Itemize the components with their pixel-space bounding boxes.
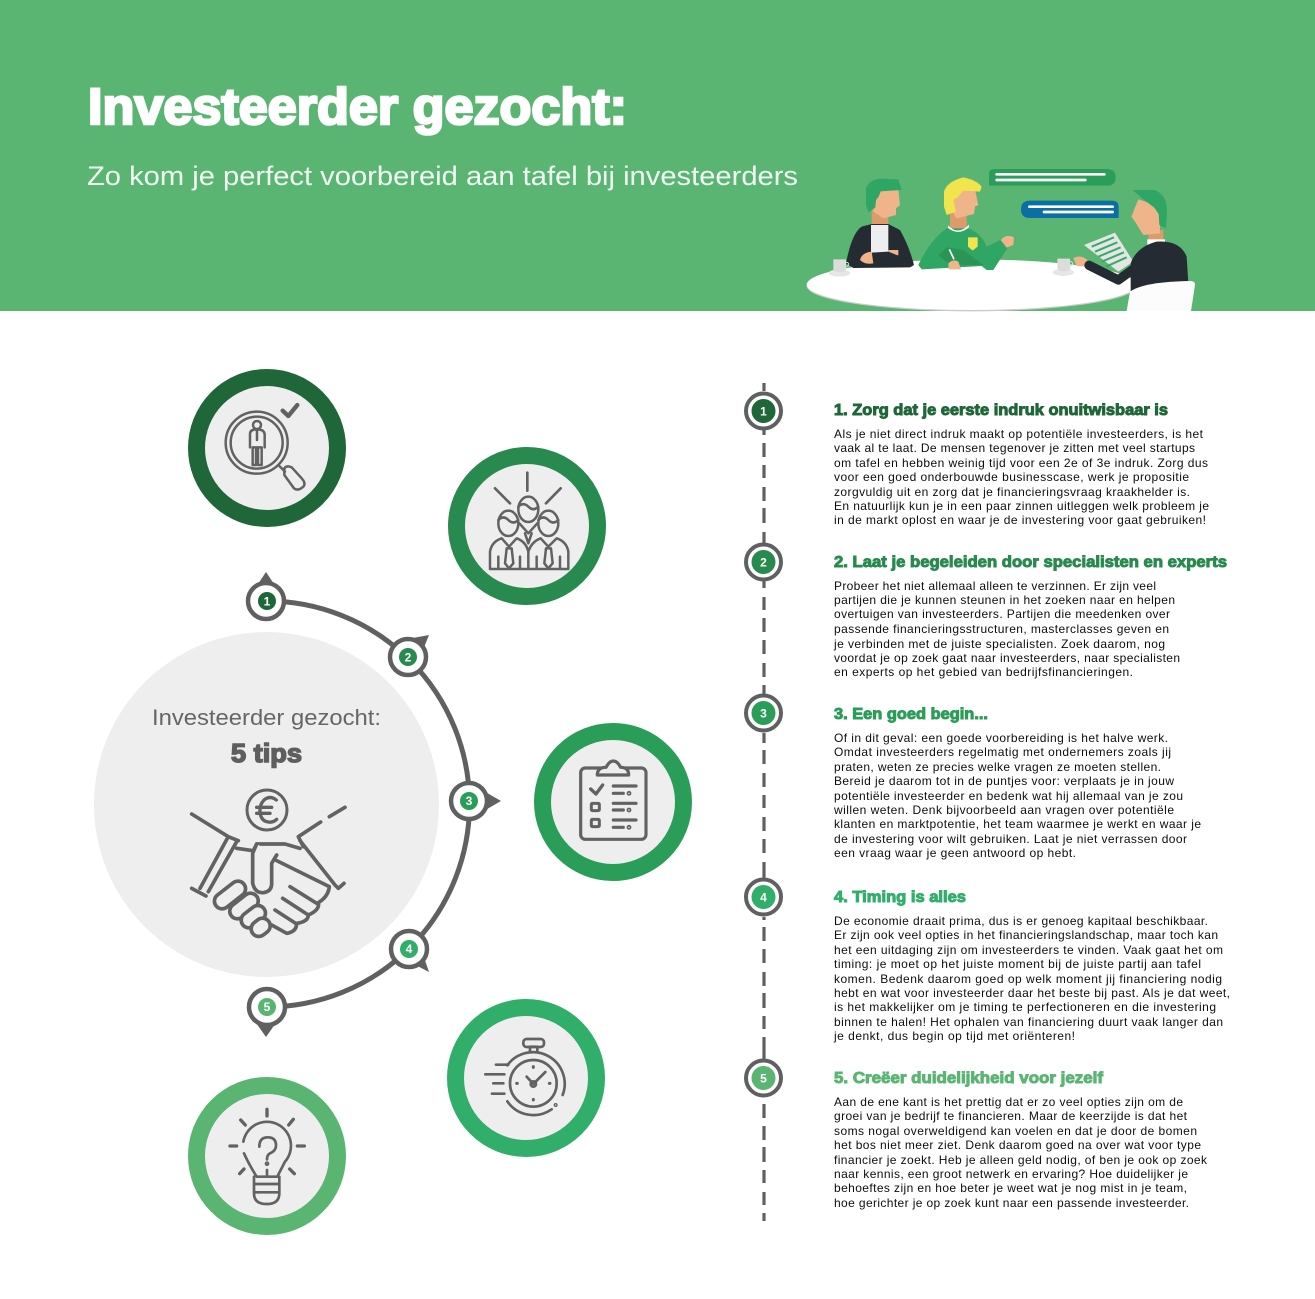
tip 4 body bbox=[833, 914, 1230, 1043]
timeline bbox=[746, 383, 781, 1221]
title: Investeerder gezocht: bbox=[88, 78, 627, 135]
tip 2 body bbox=[833, 579, 1180, 679]
tip 2 body: voordat je op zoek gaat naar investeerders, naar specialisten bbox=[834, 651, 1180, 665]
icon circle 2: experts bbox=[456, 456, 598, 596]
tip 3 body: Of in dit geval: een goede voorbereiding is het halve werk. bbox=[834, 731, 1168, 745]
arc marker 1 bbox=[248, 572, 284, 619]
arc marker 2 bbox=[390, 635, 429, 675]
timeline marker 4 bbox=[746, 880, 781, 914]
tip 5 heading: 5. Creëer duidelijkheid voor jezelf bbox=[834, 1070, 1104, 1087]
tip 5 body: Aan de ene kant is het prettig dat er zo veel opties zijn om de bbox=[834, 1095, 1183, 1109]
tip 1 body: Als je niet direct indruk maakt op potentiële investeerders, is het bbox=[834, 427, 1204, 441]
tip 4 body: hebt en wat voor investeerder daar het beste bij past. Als je dat weet, bbox=[834, 986, 1230, 1000]
tip 2 heading: 2. Laat je begeleiden door specialisten en experts bbox=[834, 554, 1227, 571]
tip 5 body: groei van je bedrijf te financieren. Maar de keerzijde is dat het bbox=[834, 1109, 1188, 1123]
tip 1 body: in de markt oplost en waar je de investering voor gaat gebruiken! bbox=[834, 513, 1206, 527]
icon circle 1: magnifier bbox=[196, 378, 338, 518]
tip 2 body: partijen die je kunnen steunen in het zoeken naar en helpen bbox=[834, 593, 1175, 607]
arc marker 2: 2 bbox=[405, 650, 412, 664]
tip 2 body: overtuigen van investeerders. Partijen die meedenken over bbox=[834, 607, 1170, 621]
timeline marker 2: 2 bbox=[760, 556, 767, 570]
tip 4 body: timing: je moet op het juiste moment bij de juiste partij aan tafel bbox=[834, 957, 1201, 971]
tip 4 body: binnen te halen! Het ophalen van financiering duurt vaak langer dan bbox=[834, 1015, 1223, 1029]
timeline marker 4: 4 bbox=[760, 890, 767, 904]
tip 4 bbox=[833, 889, 1230, 1043]
tip 5 bbox=[834, 1070, 1208, 1210]
illustration: meeting at table bbox=[807, 169, 1195, 311]
tip 4 body: het een uitdaging zijn om investeerders te vinden. Vaak gaat het om bbox=[834, 943, 1223, 957]
tip 3 body: Bereid je daarom tot in de puntjes voor: verplaats je in jouw bbox=[834, 774, 1174, 788]
person left bbox=[846, 179, 914, 268]
tip 1 body: zorgvuldig uit en zorg dat je financieringsvraag kraakhelder is. bbox=[834, 485, 1190, 499]
tip 4 body: je denkt, dus begin op tijd met oriënteren! bbox=[833, 1029, 1075, 1043]
tip 3 body: willen weten. Denk bijvoorbeeld aan vragen over potentiële bbox=[833, 803, 1174, 817]
tip 3 body: klanten en marktpotentie, het team waarmee je werkt en waar je bbox=[834, 817, 1201, 831]
tip 3 body: een vraag waar je geen antwoord op hebt. bbox=[834, 846, 1076, 860]
tip 5 body: hoe gerichter je op zoek kunt naar een passende investeerder. bbox=[834, 1196, 1189, 1210]
arc marker 4: 4 bbox=[406, 942, 413, 956]
tip 4 body: Er zijn ook veel opties in het financieringslandschap, maar toch kan bbox=[834, 928, 1218, 942]
icon circle 3: checklist bbox=[542, 732, 684, 872]
icon: clipboard checklist bbox=[581, 761, 646, 839]
tip 5 body: soms nogal overweldigend kan voelen en dat je door de bomen bbox=[834, 1124, 1197, 1138]
person middle bbox=[918, 177, 1014, 270]
icon: handshake with euro bbox=[192, 790, 345, 940]
tip 2 bbox=[833, 554, 1227, 679]
tip 1 body: vaak al te laat. De mensen tegenover je zitten met veel startups bbox=[834, 441, 1195, 455]
tip 4 body: De economie draait prima, dus is er genoeg kapitaal beschikbaar. bbox=[834, 914, 1208, 928]
tip 5 body bbox=[834, 1095, 1208, 1210]
timeline marker 3 bbox=[746, 696, 781, 730]
person right bbox=[1073, 190, 1195, 311]
coffee cups bbox=[829, 259, 1074, 277]
tip 1 body bbox=[834, 427, 1209, 527]
tip 4 heading: 4. Timing is alles bbox=[834, 889, 966, 906]
arc marker 5 bbox=[249, 989, 285, 1037]
arc marker 1: 1 bbox=[264, 594, 271, 608]
numbered arc bbox=[248, 572, 501, 1037]
speech bubble blue bbox=[1021, 201, 1119, 218]
center heading: Investeerder gezocht: bbox=[152, 705, 381, 730]
tip 5 body: financier je zoekt. Heb je alleen geld nodig, of ben je ook op zoek bbox=[834, 1153, 1208, 1167]
icon circle 5: light bulb bbox=[196, 1086, 338, 1226]
icon: stopwatch bbox=[485, 1039, 565, 1115]
icon circle 4: stopwatch bbox=[456, 1008, 596, 1148]
tip 3 body: praten, weten ze precies welke vragen ze moeten stellen. bbox=[834, 760, 1161, 774]
timeline marker 1: 1 bbox=[760, 404, 767, 418]
tip 2 body: Probeer het niet allemaal alleen te verzinnen. Er zijn veel bbox=[834, 579, 1156, 593]
arc marker 3: 3 bbox=[466, 794, 473, 808]
tip 3 body: Omdat investeerders regelmatig met ondernemers zoals jij bbox=[834, 745, 1171, 759]
timeline marker 1 bbox=[746, 394, 781, 428]
tip 1 bbox=[834, 402, 1209, 527]
icon: magnifier with person bbox=[226, 405, 304, 490]
icon: team of specialists bbox=[490, 473, 568, 569]
speech bubble green bbox=[989, 169, 1116, 186]
tip 2 body: passende financieringsstructuren, masterclasses geven en bbox=[834, 622, 1169, 636]
tip 3 body: potentiële investeerder en bedenk wat hij allemaal van je zou bbox=[834, 789, 1183, 803]
tip 3 bbox=[833, 706, 1201, 860]
timeline marker 5 bbox=[746, 1060, 781, 1096]
tip 1 body: En natuurlijk kun je in een paar zinnen uitleggen welk probleem je bbox=[834, 499, 1209, 513]
arc marker 4 bbox=[391, 931, 429, 972]
tip 1 body: om tafel en hebben weinig tijd voor een 2e of 3e indruk. Zorg dus bbox=[834, 456, 1208, 470]
timeline marker 5: 5 bbox=[760, 1072, 767, 1086]
arc marker 5: 5 bbox=[264, 1000, 271, 1014]
timeline marker 3: 3 bbox=[760, 706, 767, 720]
tip 4 body: komen. Bedenk daarom goed op welk moment jij financiering nodig bbox=[834, 972, 1222, 986]
tip 2 body: en experts op het gebied van bedrijfsfinancieringen. bbox=[834, 665, 1133, 679]
icon: light bulb with question mark bbox=[230, 1109, 304, 1204]
subtitle: Zo kom je perfect voorbereid aan tafel bij investeerders bbox=[87, 161, 798, 191]
tip 3 body: de investering voor wilt gebruiken. Laat je niet verrassen door bbox=[834, 832, 1187, 846]
tip 1 body: voor een goed onderbouwde businesscase, werk je propositie bbox=[834, 470, 1189, 484]
tip 5 body: behoeftes zijn en hoe beter je weet wat je nog mist in je team, bbox=[834, 1181, 1187, 1195]
center panel: 5 tips bbox=[94, 632, 439, 977]
table bbox=[807, 259, 1137, 311]
tip 3 heading: 3. Een goed begin... bbox=[834, 706, 988, 723]
tip 2 body: je verbinden met de juiste specialisten. Zoek daarom, nog bbox=[833, 637, 1165, 651]
tip 5 body: het bos niet meer ziet. Denk daarom goed na over wat voor type bbox=[834, 1138, 1201, 1152]
header banner bbox=[0, 0, 1315, 311]
tip 3 body bbox=[833, 731, 1201, 860]
timeline marker 2 bbox=[746, 544, 781, 580]
tip 4 body: is het makkelijker om je timing te perfectioneren en die investering bbox=[834, 1000, 1216, 1014]
tip 1 heading: 1. Zorg dat je eerste indruk onuitwisbaar is bbox=[834, 402, 1168, 419]
arc marker 3 bbox=[451, 783, 501, 819]
center subheading: 5 tips bbox=[231, 738, 302, 768]
tip 5 body: naar kennis, een groot netwerk en ervaring? Hoe duidelijker je bbox=[834, 1167, 1188, 1181]
